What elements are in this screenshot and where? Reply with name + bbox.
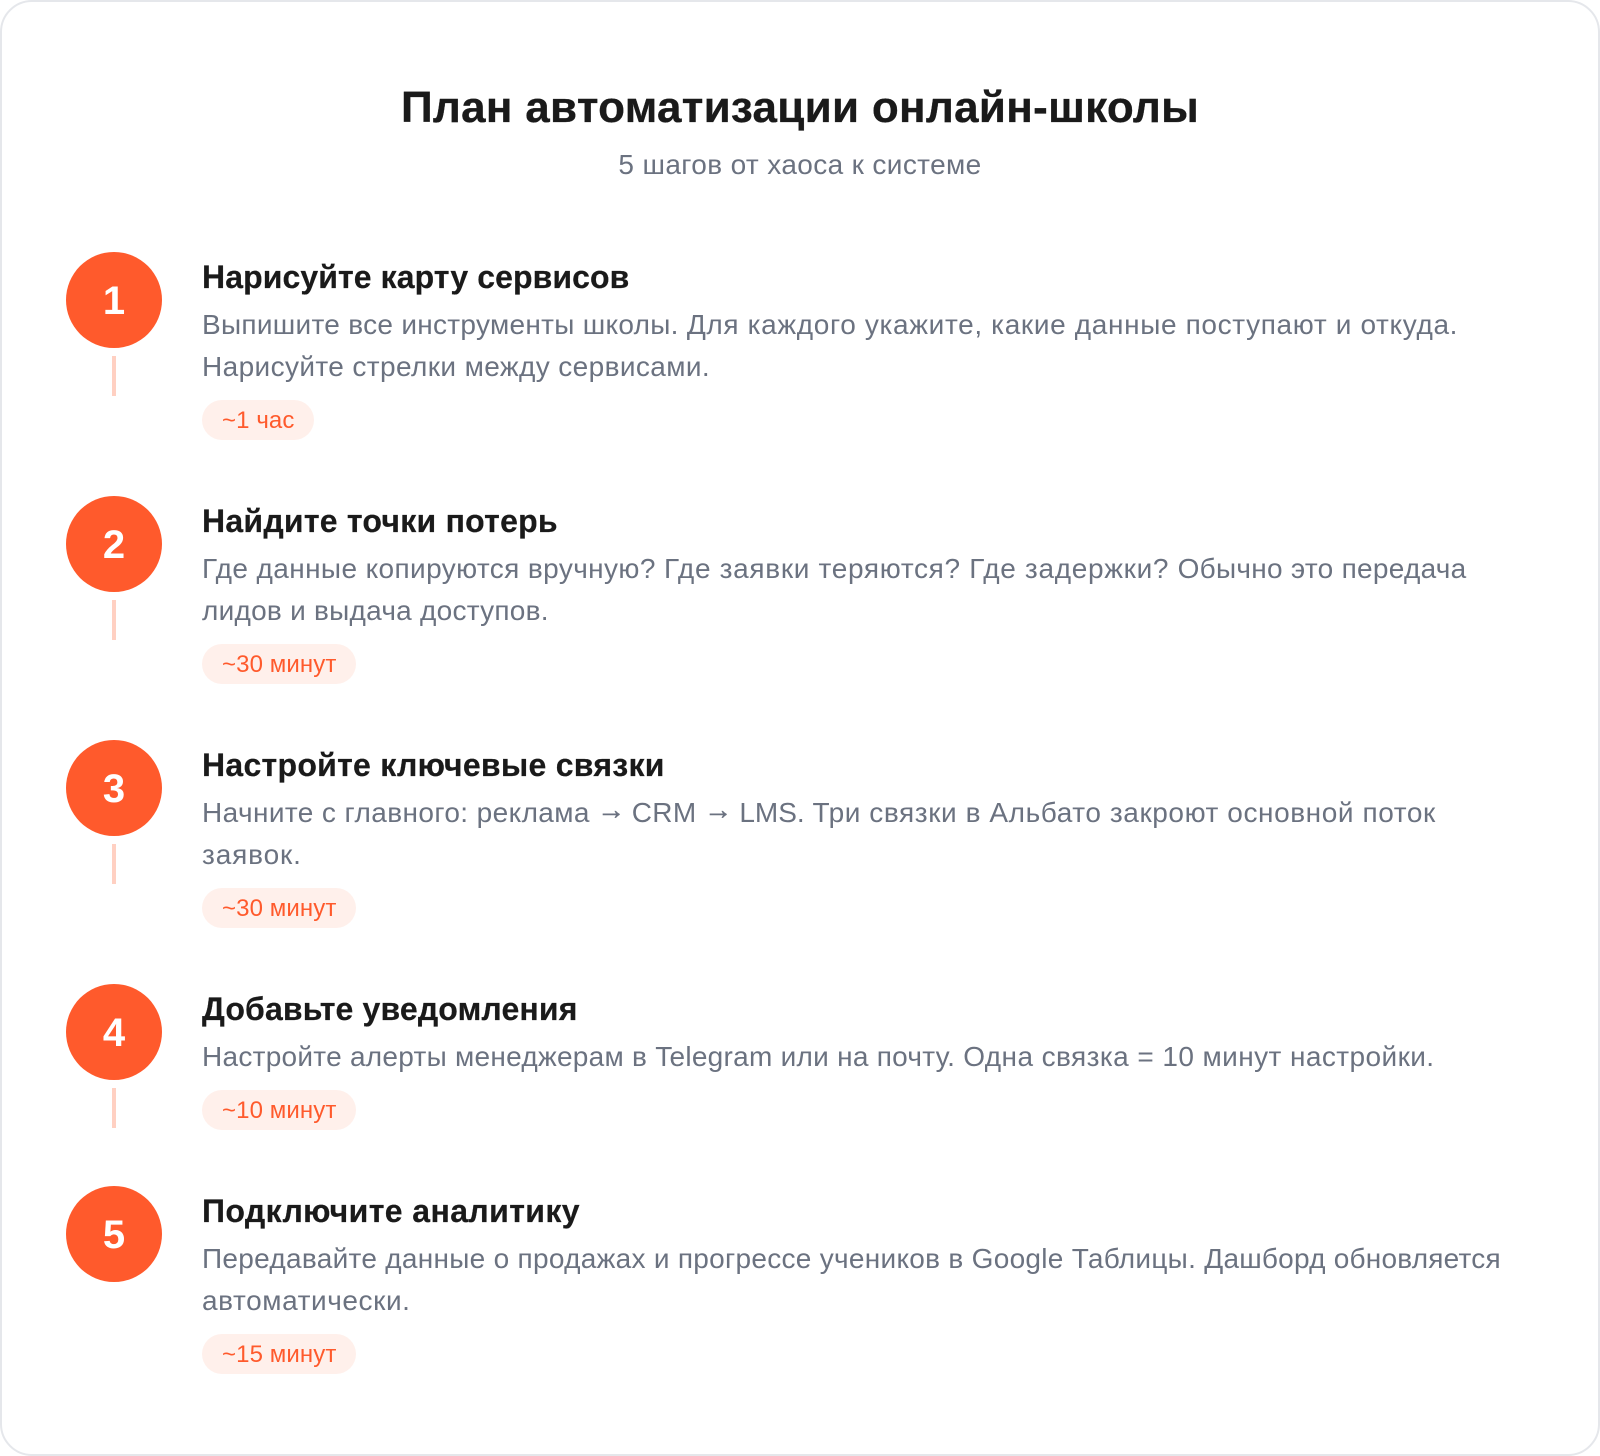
step 3 time badge: ~30 минут [222,895,336,922]
connector line 3 [112,844,116,884]
step number 4 [66,984,162,1080]
step 3 description [202,794,1436,870]
step number 5 [66,1186,162,1282]
step 4 description: Настройте алерты менеджерам в Telegram или на почту. Одна связка = 10 минут настройки. [202,1041,1434,1072]
step 5 description [202,1243,1501,1316]
step 3 description: Начните с главного: реклама → CRM → LMS. Три связки в Альбато закроют основной поток [202,794,1436,828]
step 2 description [202,553,1467,626]
connector line 1 [112,356,116,396]
step 2 time badge: ~30 минут [222,651,336,678]
connector line 4 [112,1088,116,1128]
step number 2 [66,496,162,592]
step 1 time badge [202,400,314,440]
step number 3: 3 [103,767,125,811]
step number 3 [66,740,162,836]
connector line 2 [112,600,116,640]
subtitle: 5 шагов от хаоса к системе [618,149,982,180]
step 4 time badge: ~10 минут [222,1097,336,1124]
step 5 time badge: ~15 минут [222,1341,336,1368]
step 5 [66,1186,1501,1374]
step number 1 [66,252,162,348]
step 2 time badge [202,644,356,684]
step 3 description: заявок. [202,839,302,870]
step 5 heading: Подключите аналитику [202,1193,580,1229]
step 3 heading: Настройте ключевые связки [202,747,665,783]
step 2 description: Где данные копируются вручную? Где заявки теряются? Где задержки? Обычно это передача [202,553,1467,584]
step 2 [66,496,1467,684]
step number 5: 5 [103,1213,125,1257]
step 2 heading: Найдите точки потерь [202,503,558,539]
step 1 heading: Нарисуйте карту сервисов [202,259,629,295]
step number 4: 4 [103,1011,125,1055]
step 2 description: лидов и выдача доступов. [202,595,549,626]
step 4 heading: Добавьте уведомления [202,991,578,1027]
step 5 time badge [202,1334,356,1374]
step 1 time badge: ~1 час [222,407,294,434]
step 3 [66,740,1436,928]
step 4 [66,984,1434,1130]
step number 1: 1 [103,279,125,323]
title: План автоматизации онлайн-школы [401,83,1199,132]
step 1 [66,252,1458,440]
step 3 time badge [202,888,356,928]
step 1 description: Нарисуйте стрелки между сервисами. [202,351,710,382]
step 4 time badge [202,1090,356,1130]
step 1 description [202,309,1458,382]
step number 2: 2 [103,523,125,567]
step 1 description: Выпишите все инструменты школы. Для каждого укажите, какие данные поступают и откуда. [202,309,1458,340]
step 5 description: Передавайте данные о продажах и прогрессе учеников в Google Таблицы. Дашборд обновляется [202,1243,1501,1274]
step 5 description: автоматически. [202,1285,411,1316]
